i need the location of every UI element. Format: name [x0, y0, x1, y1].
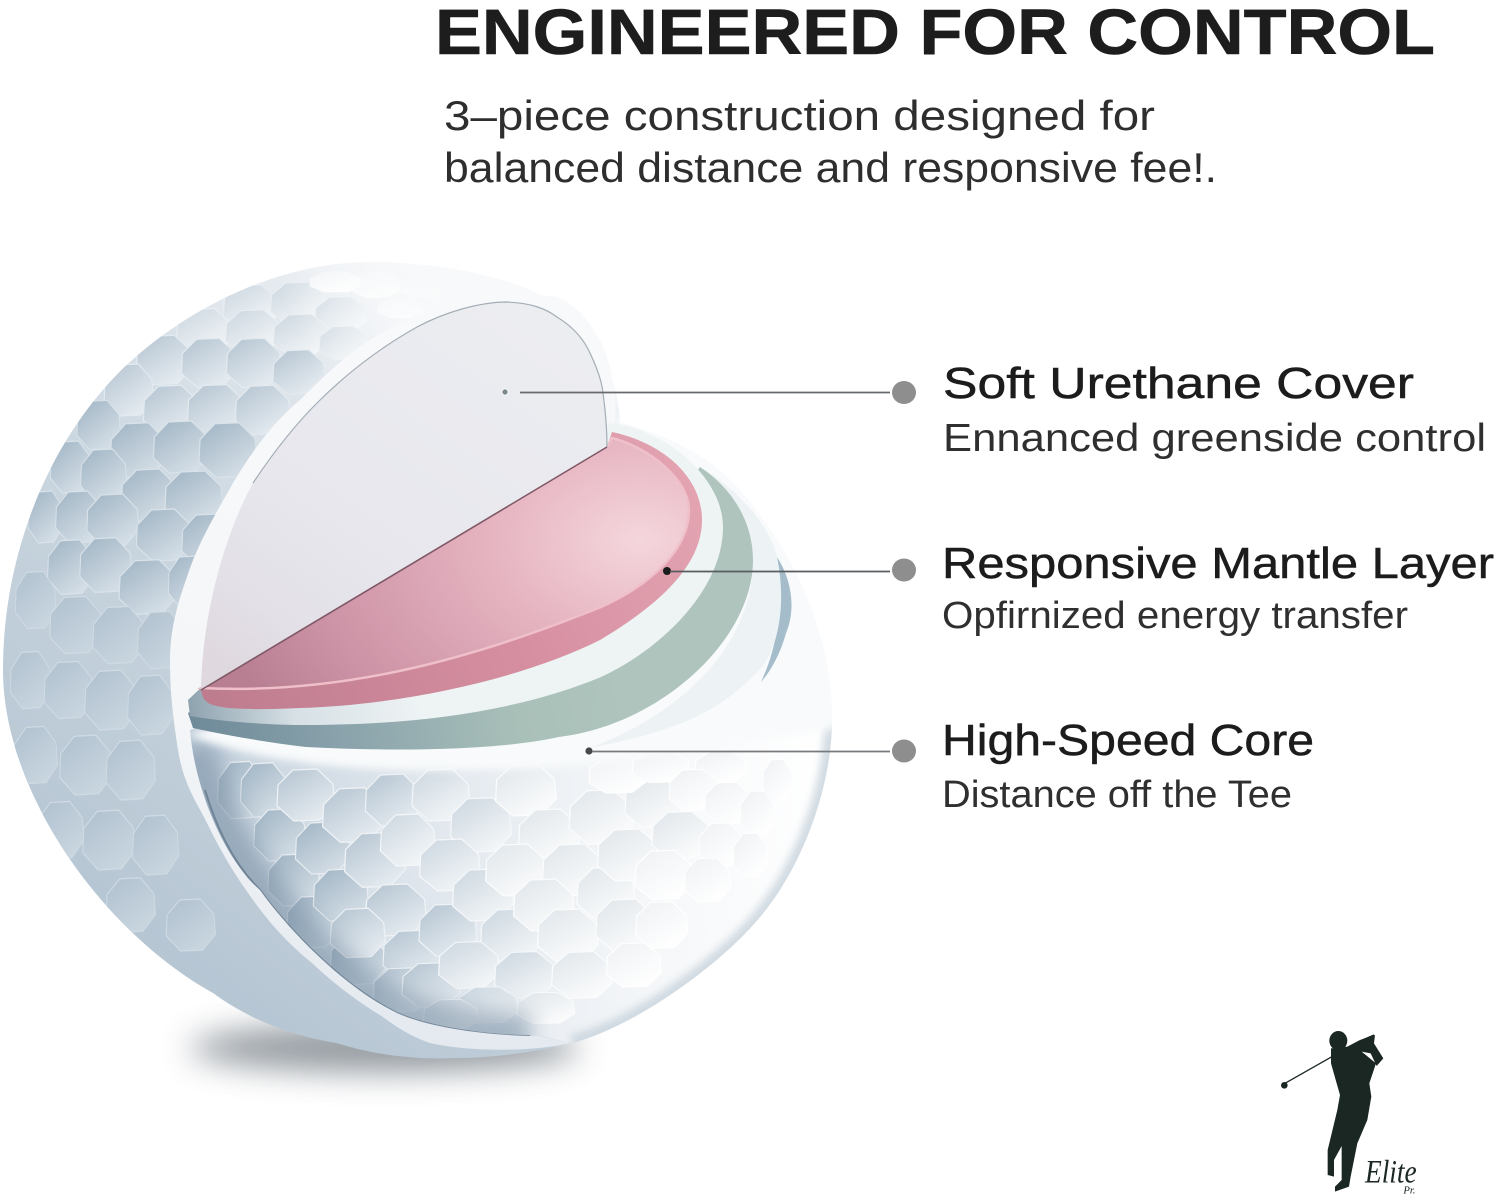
back shell dimples lower — [10, 571, 216, 951]
heading: High-Speed Core — [942, 716, 1314, 765]
pink mantle disc surface — [201, 438, 689, 689]
bowl dimples dark — [218, 761, 386, 985]
lower dimpled bowl — [190, 728, 832, 1043]
subtitle — [444, 92, 1217, 191]
bowl dimples pale — [486, 764, 710, 1024]
end dot — [892, 558, 916, 582]
logo: golfer silhouette with Elite Pro script — [1281, 1031, 1417, 1196]
end dot — [892, 740, 916, 762]
back shell dimples dark band — [28, 400, 257, 614]
pink mantle disc edge — [201, 432, 702, 709]
face top edge line — [253, 302, 607, 483]
blue interior sliver — [761, 557, 792, 682]
golfer head — [1329, 1031, 1347, 1050]
bowl dimples mid — [277, 769, 477, 1012]
heading: Soft Urethane Cover — [943, 359, 1414, 408]
back shell dimples middle — [104, 335, 325, 435]
description: Ennanced greenside control — [943, 417, 1486, 460]
inner white interior band — [590, 467, 781, 748]
golfer body — [1328, 1035, 1383, 1192]
golf ball cutaway illustration — [0, 250, 850, 1080]
bowl dimples faint right — [589, 751, 792, 987]
back shell dimples upper — [176, 282, 368, 360]
callout: high-speed core — [585, 716, 1314, 816]
end dot — [892, 381, 916, 404]
bowl dimples light — [380, 769, 556, 1031]
white outer rim — [170, 294, 615, 1050]
brand script: Elite — [1364, 1154, 1417, 1190]
leader line — [520, 392, 890, 394]
soft dark shading beside rim — [192, 745, 530, 1036]
brand suffix: Pr. — [1402, 1185, 1415, 1196]
top highlight fade — [319, 262, 460, 341]
description: Distance off the Tee — [942, 774, 1292, 816]
upper white cap of outer shell — [188, 400, 850, 771]
pointer dot — [585, 747, 593, 755]
soft outline shading on the right edge — [572, 720, 832, 1043]
ground shadow — [190, 1024, 580, 1072]
subtitle: 3–piece construction designed for — [444, 92, 1155, 139]
green mantle layer band — [188, 467, 753, 750]
leader line — [592, 750, 890, 752]
back shell faint top dimples — [309, 276, 376, 298]
golf club — [1285, 1035, 1374, 1083]
club head — [1281, 1082, 1288, 1089]
subtitle: balanced distance and responsive fee!. — [444, 144, 1217, 191]
leader line — [670, 570, 890, 572]
heading: Responsive Mantle Layer — [942, 539, 1494, 588]
white cover cross-section face — [201, 302, 607, 690]
description: Opfirnized energy transfer — [942, 595, 1408, 637]
callout: responsive mantle layer — [663, 539, 1494, 637]
outer back shell — [3, 262, 750, 1058]
pointer dot — [663, 567, 671, 575]
dark diagonal seam — [201, 447, 607, 690]
callout: soft urethane cover — [502, 359, 1486, 460]
white inner layer band — [188, 423, 723, 725]
pointer dot — [502, 389, 508, 395]
thin dark seam beside rim — [205, 790, 530, 1036]
